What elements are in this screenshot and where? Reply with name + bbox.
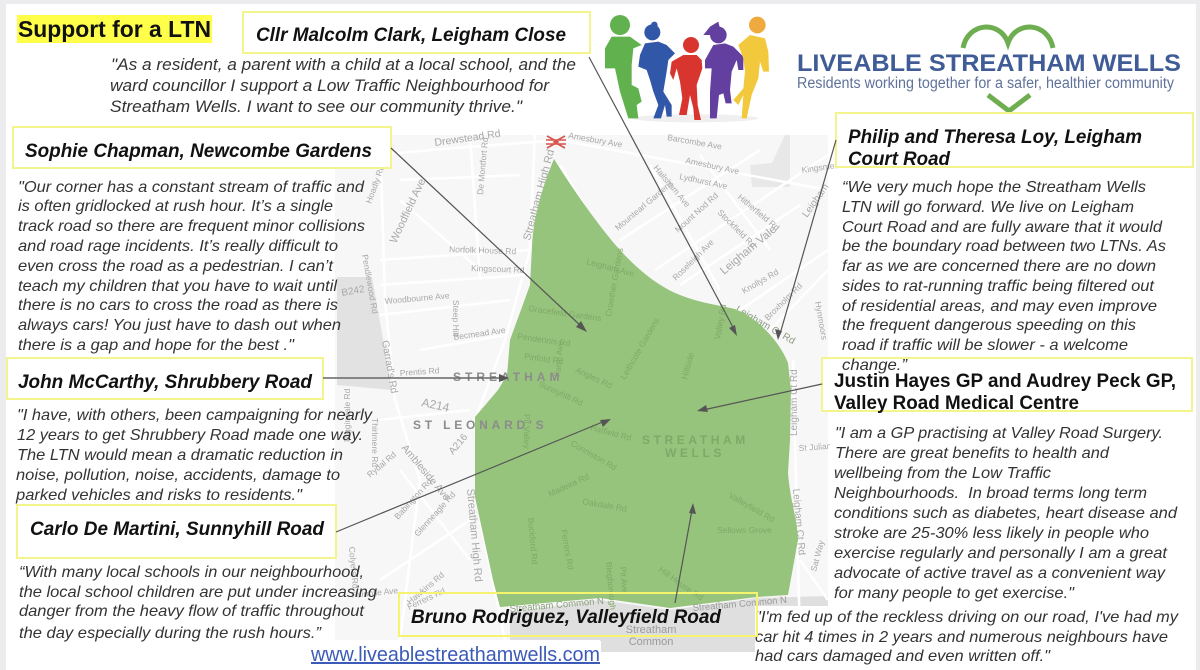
panel: John McCarthy: 12 years to get Shrubbery Road made one way.: [17, 427, 363, 444]
map road labels: St Julian's: [798, 440, 838, 453]
arrow: Bruno Rodriguez: [675, 503, 696, 603]
panel: Justin Hayes quote: exercise regularly and personally I am a great: [834, 545, 1168, 562]
panel: Carlo De Martini: Carlo De Martini, Sunnyhill Road: [30, 519, 324, 540]
child: yellow: [733, 17, 769, 118]
panel: Sophie Chapman: is often gridlocked at rush hour. It’s a single: [18, 198, 333, 215]
panel: Sophie Chapman: "Our corner has a constant stream of traffic and: [18, 179, 365, 196]
link: website: www.liveablestreathamwells.com: [310, 644, 600, 666]
panel: Malcolm Clark: ward councillor I support a Low Traffic Neighbourhood for: [110, 76, 550, 95]
panel: Philip and Theresa Loy quote: far as we are concerned there are no down: [842, 258, 1156, 275]
panel: Sophie Chapman: even cross the road as a pedestrian. I can’t: [18, 258, 334, 275]
panel: John McCarthy: parked vehicles and risks to residents.": [15, 487, 303, 504]
map road labels: Leigham Ct Rd: [789, 369, 800, 436]
panel: Justin Hayes quote: There are great benefits to health and: [835, 445, 1110, 462]
arrow: Carlo De Martini: [336, 419, 611, 532]
map road labels: Babington Rd: [392, 476, 434, 521]
panel: Justin Hayes quote: "I am a GP practising at Valley Road Surgery.: [835, 425, 1163, 442]
panel: Malcolm Clark: "As a resident, a parent with a child at a local school, and the: [111, 55, 576, 74]
map road labels: Thirlmere Rd: [370, 418, 380, 467]
panel: John McCarthy: [7, 358, 373, 504]
panel: Justin Hayes label: Justin Hayes GP and Audrey Peck GP,: [834, 371, 1176, 392]
map road labels: Leigham Ct Rd: [790, 488, 807, 556]
panel: Justin Hayes quote: conditions such as diabetes, heart disease and: [834, 505, 1178, 522]
panel: Philip and Theresa Loy quote: be the boundary road between two LTNs. As: [842, 238, 1166, 255]
panel: Justin Hayes label: [822, 358, 1192, 414]
panel: Justin Hayes quote: for many people to get exercise.": [834, 585, 1075, 602]
map road labels: Norfolk House Rd: [449, 244, 517, 256]
Streatham Wells LTN green area: Streatham Common N: [509, 596, 605, 615]
arrow: Justin Hayes: [697, 384, 822, 412]
Streatham Wells LTN green area: Leigham Ave: [585, 256, 636, 279]
Streatham Wells LTN green area: Farm Ave: [552, 340, 565, 377]
Streatham Wells LTN green area: Pinfold Rd: [524, 351, 564, 366]
panel: Bruno Rodriguez label: [399, 593, 757, 636]
Streatham Wells LTN green area: Common: [629, 636, 673, 648]
panel: Sophie Chapman: Sophie Chapman, Newcombe Gardens: [25, 141, 372, 162]
panel: Bruno Rodriguez label: Bruno Rodriguez, Valleyfield Road: [411, 607, 721, 628]
map road labels: Garrad's Rd: [379, 340, 399, 394]
map road labels: Hitherfield Rd: [736, 192, 782, 233]
logo: Liveable Streatham Wells: LIVEABLE STREATHAM WELLS: [797, 50, 1181, 77]
map road labels: Woodbourne Ave: [384, 290, 450, 306]
Streatham Wells LTN green area: Buckford Rd: [526, 517, 540, 565]
panel: Sophie Chapman: [13, 127, 391, 354]
panel: Philip and Theresa Loy quote: change.”: [842, 357, 908, 374]
map road labels: Lydhurst Ave: [679, 171, 729, 191]
map road labels: Stockfield Rd: [716, 207, 758, 250]
panel: Philip and Theresa Loy quote: Court Road and are fully aware that it would: [842, 219, 1163, 236]
map road labels: Mountearl Gardens: [613, 178, 675, 233]
panel: Justin Hayes quote: stroke are 25-30% less likely in people who: [834, 525, 1149, 542]
icon: children running: [605, 15, 769, 122]
panel: Philip and Theresa Loy quote: the frequent dangerous speeding on this: [842, 317, 1136, 334]
arrow: Sophie Chapman: [391, 148, 587, 332]
Streatham Wells LTN green area: Pendennis Rd: [517, 331, 571, 348]
panel: Carlo De Martini: the day especially during the rush hours.”: [19, 625, 322, 642]
Streatham Wells LTN green area: Crowther Gardens: [603, 247, 625, 317]
panel: Philip and Theresa Loy quote: LTN will go forward. We live on Leigham: [842, 199, 1134, 216]
panel: Bruno Rodriguez quote: had cars damaged and even written off.": [755, 648, 1051, 665]
Streatham Wells LTN green area: Angles Rd: [574, 365, 614, 391]
child: purple: [703, 22, 743, 118]
Streatham Wells LTN green area: Sunnyhill Rd: [537, 379, 585, 408]
arrow: Malcolm Clark: [589, 57, 737, 336]
panel: Philip and Theresa Loy label: Court Road: [848, 149, 950, 170]
map road labels: A214: [420, 395, 451, 415]
Streatham Wells LTN green area: Hill House Rd: [657, 564, 705, 603]
Streatham Wells LTN green area: Ferrers Rd: [559, 529, 576, 571]
Streatham Wells LTN green area: WELLS: [665, 446, 725, 460]
Streatham Wells LTN green area: Sellows Grove: [717, 525, 772, 535]
map road labels: Drewstead Rd: [434, 128, 501, 149]
map road labels: Knollys Rd: [740, 267, 780, 296]
Streatham Wells LTN green area: Pit Valley: [522, 414, 532, 450]
panel: John McCarthy: John McCarthy, Shrubbery Road: [18, 372, 312, 393]
Streatham Wells LTN green area: [413, 159, 798, 648]
child: blue: [638, 22, 675, 118]
panel: Sophie Chapman: track road so there are frequent minor collisions: [18, 218, 365, 235]
map road labels: Colyers Rd: [347, 546, 361, 589]
map road labels: Leigham: [800, 182, 831, 220]
map road labels: Pendlewood Rd: [360, 254, 380, 315]
panel: Bruno Rodriguez quote: "I'm fed up of the reckless driving on our road, I've had my: [755, 609, 1179, 626]
map road labels: Leigham Vale: [718, 223, 779, 277]
panel: Sophie Chapman: there is a gap and hope for the best .": [18, 337, 295, 354]
panel: Philip and Theresa Loy quote: “We very much hope the Streatham Wells: [842, 179, 1146, 196]
panel: Carlo De Martini: [17, 505, 377, 642]
panel: Philip and Theresa Loy quote: of residential areas, and may even improve: [842, 298, 1157, 315]
map road labels: B242: [341, 284, 366, 299]
Streatham Wells LTN green area: Gracefield Gardens: [528, 303, 602, 323]
panel: Philip and Theresa Loy quote: road if traffic will be slower - a welcome: [842, 337, 1128, 354]
panel: Carlo De Martini: the local school children are put under increasing: [19, 584, 377, 601]
panel: Bruno Rodriguez quote: [755, 606, 1196, 666]
panel: Sophie Chapman: and road rage incidents. It’s really difficult to: [18, 238, 338, 255]
panel: Malcolm Clark: Cllr Malcolm Clark, Leigham Close: [256, 25, 566, 46]
map road labels: Woodfield Ave: [388, 177, 428, 245]
title: Support for a LTN: [18, 16, 211, 42]
map road labels: Sat Way: [808, 538, 826, 573]
panel: Bruno Rodriguez quote: car hit 4 times in 2 years and numerous neighbours have: [755, 629, 1168, 646]
map road labels: Streatham High Rd: [521, 148, 557, 242]
panel: Malcolm Clark: Streatham Wells. I want to see our community thrive.": [110, 97, 523, 116]
Streatham Wells LTN green area: Blegborough: [604, 561, 618, 610]
panel: John McCarthy: "I have, with others, been campaigning for nearly: [17, 407, 373, 424]
map road labels: Riggindale Rd: [342, 388, 352, 442]
map road labels: Becmead Ave: [453, 325, 506, 342]
panel: Sophie Chapman: teach my children that you have to wait until: [18, 278, 337, 295]
child: green: [605, 15, 642, 118]
panel: Justin Hayes quote: wellbeing from the Low Traffic: [834, 465, 1051, 482]
Streatham Wells LTN green area: Streatham: [626, 624, 676, 636]
panel: Sophie Chapman: always cars! You just have to dash out when: [18, 317, 341, 334]
map road labels: Barcombe Ave: [667, 132, 723, 152]
Streatham Wells LTN green area: Conniston Rd: [569, 438, 619, 473]
logo: Liveable Streatham Wells: Residents working together for a safer, healthier community: [797, 75, 1174, 92]
arrow: Philip and Theresa Loy: [775, 140, 836, 340]
map road labels: Amesbury Ave: [568, 130, 623, 150]
map road labels: Rydal Rd: [365, 449, 398, 480]
map road labels: Hoadly Rd: [363, 164, 387, 205]
Streatham Wells LTN green area: Leithcote Gardens: [618, 316, 661, 381]
map road labels: Ferrers Rd: [406, 585, 447, 612]
logo: Liveable Streatham Wells: [797, 27, 1181, 111]
panel: Philip and Theresa Loy quote: [830, 169, 1196, 374]
panel: John McCarthy: The LTN would mean a dramatic reduction in: [17, 447, 343, 464]
Streatham Wells LTN green area: Hatfield Rd: [589, 422, 633, 443]
map: Streatham Wells area: [335, 128, 845, 652]
Streatham Wells LTN green area: Pit Ave: [618, 566, 630, 594]
map road labels: Streatham High Rd: [464, 488, 484, 582]
Streatham Wells LTN green area: Hillside: [679, 351, 696, 381]
child: red: [670, 37, 702, 120]
map road labels: Prentis Rd: [399, 365, 440, 378]
Streatham Wells LTN green area: Oakdale Rd: [582, 496, 628, 514]
panel: Justin Hayes quote: Neighbourhoods. In broad terms long term: [834, 485, 1147, 502]
map road labels: A216: [447, 432, 471, 457]
map road labels: Amesbury Ave: [685, 155, 740, 176]
map road labels: Mount Nod Rd: [673, 190, 720, 234]
panel: Carlo De Martini: danger from the heavy flow of traffic throughout: [19, 603, 365, 620]
panel: Justin Hayes quote: [830, 412, 1196, 608]
map road labels: Hynmoors: [813, 301, 830, 340]
icon: railway station: [546, 136, 566, 148]
Streatham Wells LTN green area: Valley Rd: [712, 303, 728, 340]
panel: Justin Hayes label: Valley Road Medical Centre: [834, 393, 1079, 414]
map road labels: Leigham Ct Rd: [734, 304, 797, 347]
map road labels: Kingscourt Rd: [471, 263, 525, 275]
panel: Philip and Theresa Loy label: Philip and Theresa Loy, Leigham: [848, 127, 1142, 148]
map road labels: Kingsmead: [801, 159, 845, 175]
panel: Philip and Theresa Loy quote: sides to rat-running traffic being filtered out: [842, 278, 1155, 295]
map road labels: Ambleside Ave: [399, 442, 453, 503]
map road labels: Roseleigh Ave: [670, 237, 716, 282]
map road labels: Hawkins Rd: [405, 570, 446, 607]
panel: Sophie Chapman: there is no cars to cross the road as there is: [18, 297, 338, 314]
map road labels: Broxholm Rd: [762, 280, 804, 322]
map road labels: De Montfort Rd: [475, 137, 490, 195]
panel: Justin Hayes quote: advocate of active travel as a convenient way: [834, 565, 1166, 582]
Streatham Wells LTN green area: ST LEONARD'S: [413, 418, 547, 432]
panel: Carlo De Martini: “With many local schools in our neighbourhood,: [19, 564, 364, 581]
map road labels: Steep Hill: [451, 300, 461, 336]
panel: Malcolm Clark: [110, 12, 590, 116]
map road labels: Hailsham Ave: [651, 163, 693, 209]
Streatham Wells LTN green area: Madeira Rd: [547, 471, 591, 499]
panel: John McCarthy: noise, pollution, noise, accidents, damage to: [16, 467, 340, 484]
map road labels: [341, 128, 845, 612]
Streatham Wells LTN green area: Valleyfield Rd: [727, 490, 777, 525]
Streatham Wells LTN green area: STREATHAM: [453, 370, 563, 384]
map road labels: Glenneagle Rd: [412, 489, 458, 538]
Streatham Wells LTN green area: Streatham Common N: [692, 595, 788, 614]
map road labels: Fairmile Ave: [351, 585, 399, 600]
arrow: John McCarthy: [323, 374, 509, 382]
panel: Philip and Theresa Loy label: [836, 113, 1193, 170]
Streatham Wells LTN green area: STREATHAM: [642, 433, 749, 447]
